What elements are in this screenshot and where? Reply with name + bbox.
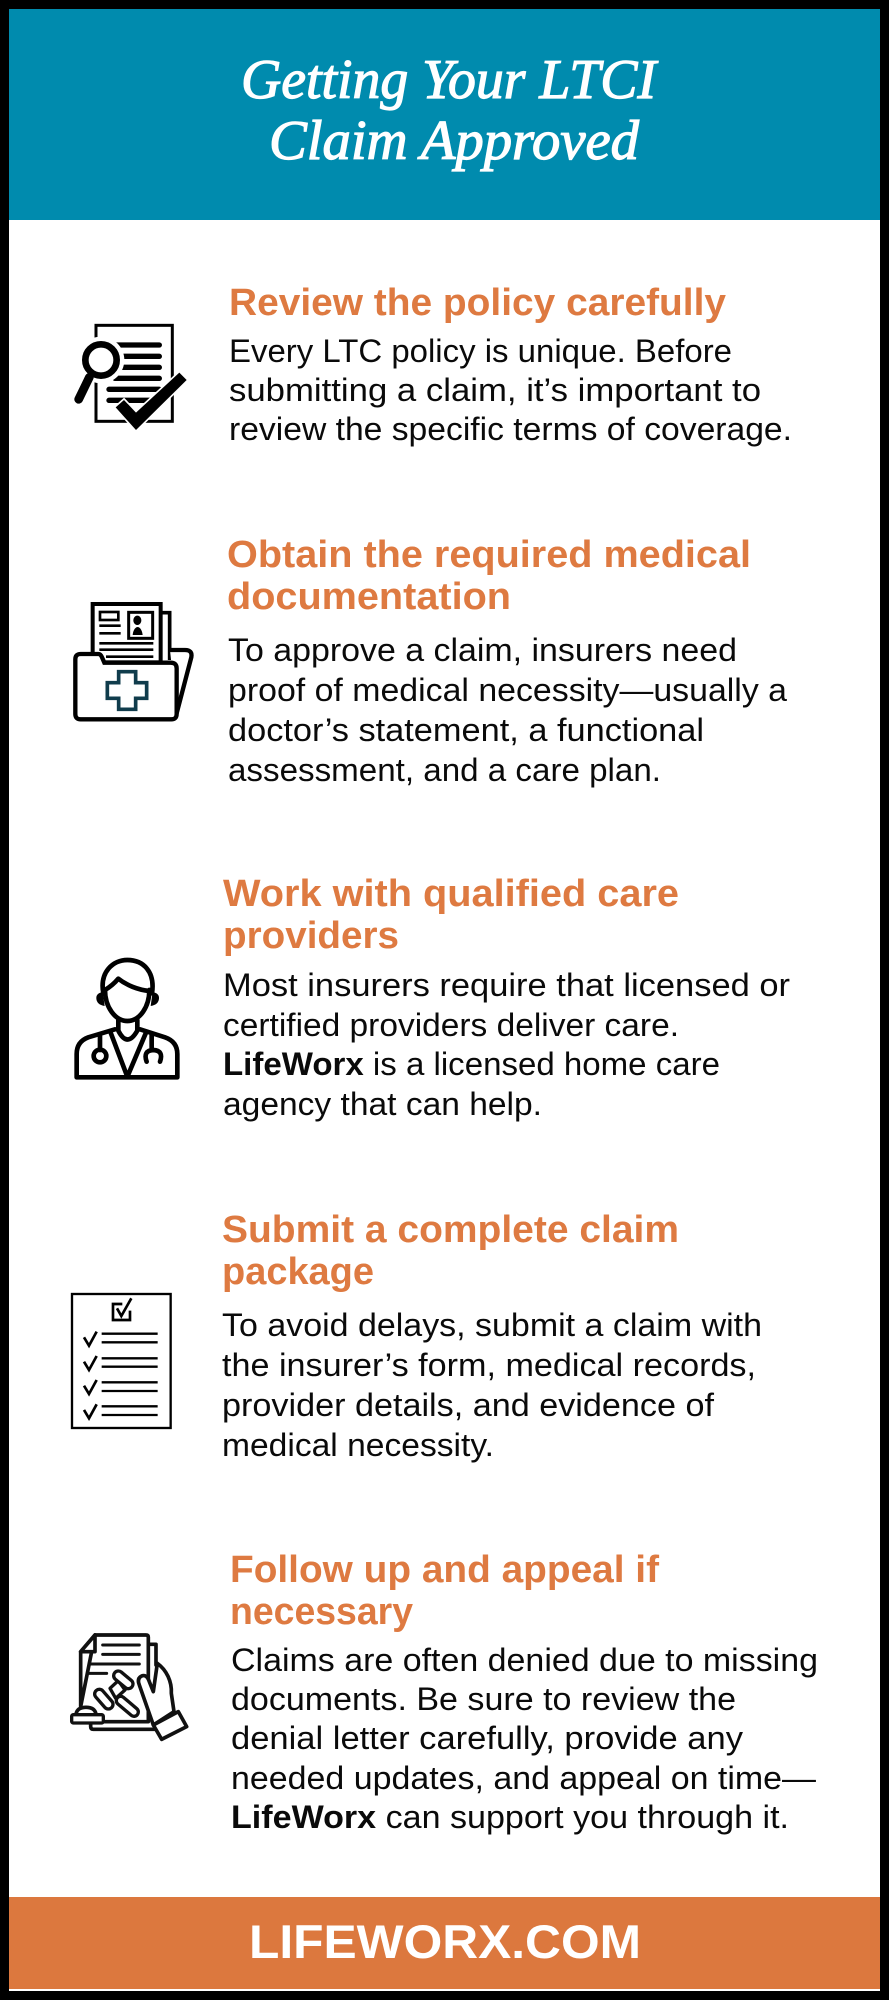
body text: LifeWorx can support you through it. [231,1799,789,1835]
title banner [9,9,880,220]
body text: provider details, and evidence of [222,1387,714,1423]
heading [230,1549,659,1633]
step 4: complete claim package [72,1209,762,1463]
footer text: LIFEWORX.COM [249,1915,641,1968]
heading: package [222,1251,374,1293]
step 5: follow up and appeal [72,1549,818,1835]
heading: Work with qualified care [223,873,679,915]
body text: denial letter carefully, provide any [231,1720,743,1756]
body text [222,1307,762,1463]
footer banner [9,1897,880,1989]
heading: Follow up and appeal if [230,1549,659,1591]
heading: Obtain the required medical [227,534,751,576]
body text: assessment, and a care plan. [228,752,661,788]
icon: legal document with gavel and hand [72,1635,187,1739]
title [241,49,658,172]
icon: medical folder [75,604,192,719]
heading [223,873,679,957]
body text: needed updates, and appeal on time— [231,1760,816,1796]
heading [222,1209,679,1293]
body text: the insurer’s form, medical records, [222,1347,756,1383]
body text: submitting a claim, it’s important to [229,372,761,408]
body text: LifeWorx is a licensed home care [223,1046,720,1082]
body text [223,967,790,1122]
body text: Every LTC policy is unique. Before [229,333,732,369]
body text: Claims are often denied due to missing [231,1642,818,1678]
body text: agency that can help. [223,1086,542,1122]
heading: Submit a complete claim [222,1209,679,1251]
icon: checklist [72,1294,171,1428]
heading [227,534,751,618]
body text [231,1642,818,1835]
body text: Most insurers require that licensed or [223,967,790,1003]
title: Getting Your LTCI [241,49,658,111]
step 2: medical documentation [75,534,787,788]
icon: doctor with stethoscope [77,960,177,1077]
heading: necessary [230,1591,413,1633]
heading: Review the policy carefully [229,282,726,324]
body text [228,632,787,788]
heading: providers [223,915,399,957]
step 3: qualified care providers [77,873,790,1122]
title: Claim Approved [269,110,640,172]
body text: doctor’s statement, a functional [228,712,704,748]
body text: To approve a claim, insurers need [228,632,737,668]
body text: certified providers deliver care. [223,1007,679,1043]
body text: To avoid delays, submit a claim with [222,1307,762,1343]
body text [229,333,792,447]
body text: documents. Be sure to review the [231,1681,736,1717]
heading: documentation [227,576,511,618]
step 1: review the policy [78,282,792,447]
body text: review the specific terms of coverage. [229,411,792,447]
body text: medical necessity. [222,1427,494,1463]
body text: proof of medical necessity—usually a [228,672,787,708]
icon: document with magnifier and check [78,325,187,430]
